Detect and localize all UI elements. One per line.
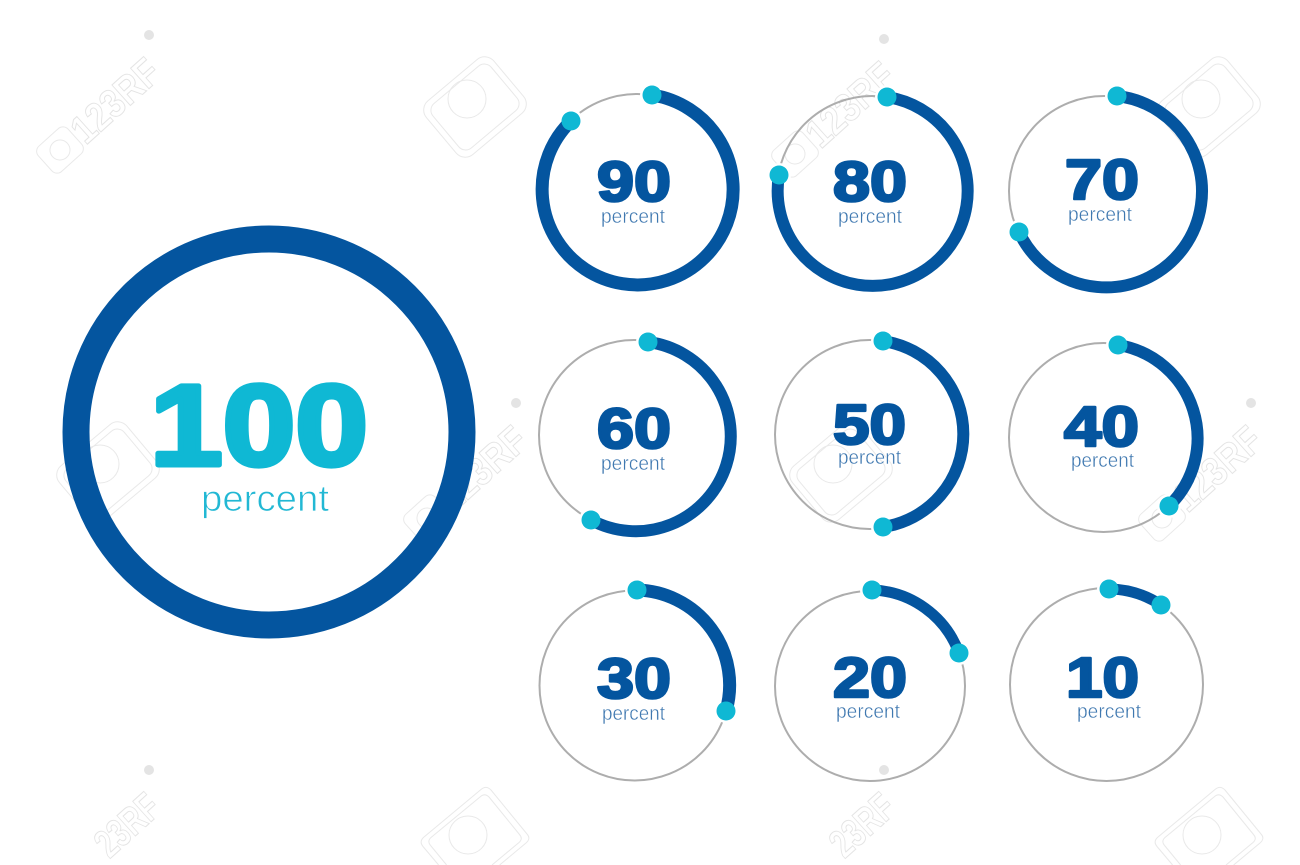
watermark: 123RF logo bottom centre: 23RF xyxy=(821,785,904,865)
gauge: 30 percent: percent xyxy=(602,703,665,725)
gauge: 50 percent: 50 xyxy=(833,393,906,457)
watermark: stamp centre xyxy=(785,417,897,527)
gauge: 90 percent: percent xyxy=(601,206,665,228)
gauge: 30 percent: 30 xyxy=(597,647,671,711)
gauge: 30 percent xyxy=(540,578,738,780)
watermark: stamp left xyxy=(52,417,164,527)
gauge: 40 percent: 40 xyxy=(1064,395,1139,459)
gauge: 50 percent: percent xyxy=(838,447,901,469)
gauge: 70 percent: percent xyxy=(1068,204,1132,226)
gauge: 20 percent xyxy=(775,578,971,781)
gauge: 10 percent: percent xyxy=(1077,701,1141,723)
watermark: 123RF logo middle right xyxy=(1133,398,1271,548)
watermark: stamp top centre xyxy=(419,52,531,162)
gauge: 20 percent: 20 xyxy=(833,646,907,710)
gauge: 80 percent: percent xyxy=(838,206,902,228)
watermark: stamp bottom right xyxy=(1155,787,1263,865)
gauge: 100 percent xyxy=(76,239,462,625)
gauge: 60 percent: percent xyxy=(601,453,665,475)
gauge: 70 percent: 70 xyxy=(1065,148,1139,212)
watermark: 123RF logo top left xyxy=(31,30,169,180)
gauge: 90 percent: 90 xyxy=(597,150,671,214)
gauge: 20 percent: percent xyxy=(836,701,900,723)
watermark: 123RF logo middle right: 123RF xyxy=(1164,418,1271,520)
gauge: 80 percent xyxy=(767,85,968,286)
watermark: 123RF logo top left: 123RF xyxy=(62,50,169,152)
gauge: 90 percent xyxy=(541,83,733,286)
gauge: 10 percent: 10 xyxy=(1066,646,1139,710)
watermark: 123RF logo bottom left: 23RF xyxy=(86,785,169,865)
watermark: 123RF logo top centre: 123RF xyxy=(797,54,904,156)
gauge: 50 percent xyxy=(775,329,964,539)
gauge: 40 percent xyxy=(1009,333,1198,532)
watermark: stamp top right xyxy=(1153,52,1265,162)
gauge: 80 percent: 80 xyxy=(833,150,907,214)
watermark: 123RF logo middle xyxy=(398,398,536,548)
gauge: 100 percent: percent xyxy=(201,478,330,519)
gauge: 10 percent xyxy=(1010,577,1203,781)
watermark: stamp bottom centre xyxy=(421,787,529,865)
gauge: 60 percent xyxy=(539,330,731,532)
gauge: 70 percent xyxy=(1007,84,1202,287)
gauge: 60 percent: 60 xyxy=(597,397,671,461)
gauge: 100 percent: 100 xyxy=(150,362,368,490)
watermark: 123RF logo middle: 123RF xyxy=(429,418,536,520)
gauge: 40 percent: percent xyxy=(1071,450,1134,472)
watermark: 123RF logo top centre xyxy=(766,34,904,184)
